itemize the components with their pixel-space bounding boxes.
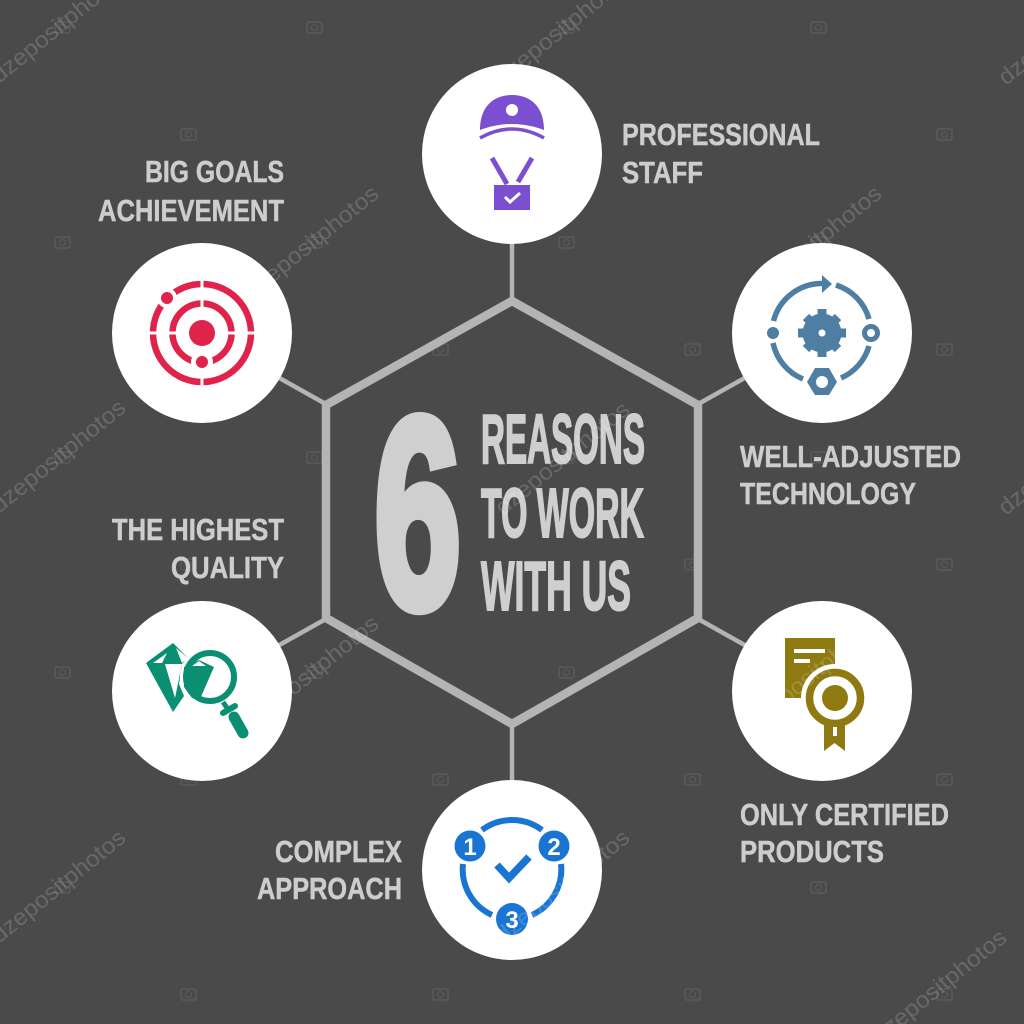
icon: diamond under magnifier xyxy=(146,643,243,733)
connector lines xyxy=(274,240,750,784)
label: big goals achievement: ACHIEVEMENT xyxy=(98,193,284,228)
label: professional staff xyxy=(622,117,820,190)
label: the highest quality: QUALITY xyxy=(171,550,284,585)
text: TO WORK xyxy=(481,474,644,552)
watermarks: dzepositphotos xyxy=(742,180,886,304)
label: complex approach: COMPLEX xyxy=(275,834,402,869)
panel: only certified products xyxy=(732,601,912,781)
panel: the highest quality xyxy=(112,601,292,781)
label: only certified products: ONLY CERTIFIED xyxy=(740,797,949,832)
panel: big goals achievement xyxy=(112,243,292,423)
panel: complex approach xyxy=(422,780,602,960)
label: only certified products xyxy=(740,797,949,869)
icon: cap and badge xyxy=(480,95,544,210)
icon: three-step check cycle xyxy=(454,820,570,935)
center title: WITH US xyxy=(481,547,631,625)
watermarks: dzepositphotos xyxy=(490,824,634,948)
label: well-adjusted technology: WELL-ADJUSTED xyxy=(740,439,961,474)
icon: three-step check cycle: 3 xyxy=(505,907,519,934)
watermarks: dzepositphotos xyxy=(239,180,383,304)
panel: professional staff xyxy=(422,64,602,244)
big number 6: 6 xyxy=(374,361,461,665)
watermarks: dzepositphotos xyxy=(239,610,383,734)
icon: certificate and medal xyxy=(785,638,869,751)
label: the highest quality xyxy=(112,512,284,585)
label: only certified products: PRODUCTS xyxy=(740,834,884,869)
label: complex approach xyxy=(257,834,402,906)
central hexagon frame xyxy=(326,301,698,724)
label: complex approach: APPROACH xyxy=(257,871,402,906)
label: big goals achievement: BIG GOALS xyxy=(145,154,284,189)
label: well-adjusted technology: TECHNOLOGY xyxy=(740,476,916,511)
icon: target xyxy=(147,278,257,388)
panel: well-adjusted technology xyxy=(732,243,912,423)
label: well-adjusted technology xyxy=(740,439,961,511)
label: big goals achievement xyxy=(98,154,284,228)
watermarks: dzepositphotos xyxy=(742,610,886,734)
icon: three-step check cycle: 2 xyxy=(547,834,561,861)
text: REASONS xyxy=(481,400,645,478)
label: the highest quality: THE HIGHEST xyxy=(112,512,284,547)
icon: gear cycle xyxy=(767,275,878,395)
center title xyxy=(481,400,645,625)
watermarks: dzepositphotos xyxy=(490,396,634,520)
icon: three-step check cycle: 1 xyxy=(463,834,477,861)
label: professional staff: STAFF xyxy=(622,155,703,190)
label: professional staff: PROFESSIONAL xyxy=(622,117,820,152)
